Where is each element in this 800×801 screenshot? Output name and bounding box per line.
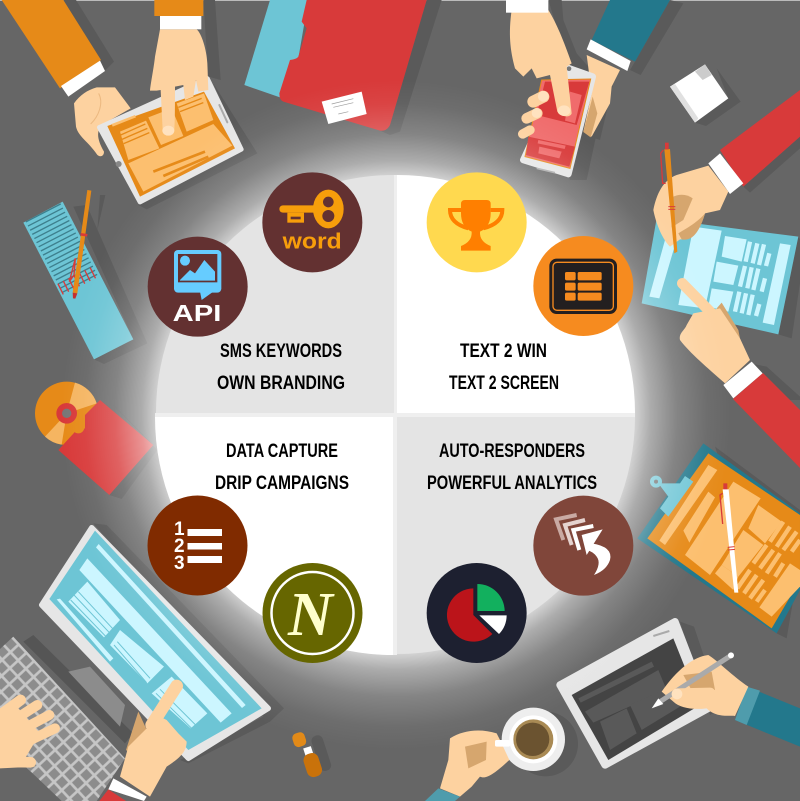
- USB stick: [291, 726, 333, 780]
- pointing hand on blue document: [680, 283, 800, 400]
- blue document: [642, 218, 800, 338]
- text: SMS keywords and own branding: [217, 341, 345, 394]
- panel: text 2 win and screen: [397, 175, 635, 413]
- coffee cup and hand: [425, 708, 578, 801]
- icon: N logo: N: [287, 581, 335, 649]
- icon: auto-reply arrow: [533, 496, 633, 596]
- icon: screen: [533, 236, 633, 336]
- icon: API image message: [148, 237, 248, 337]
- text: SMS keywords and own branding: OWN BRANDING: [217, 373, 345, 394]
- stylus hand and teal sleeve: [652, 652, 800, 747]
- icon: N logo: [262, 563, 362, 663]
- writing hand with pen and red sleeve: [653, 90, 800, 253]
- text: text 2 win and text 2 screen: [449, 341, 559, 394]
- illustration: lower-left desk items: [0, 382, 333, 801]
- icon: numbered list: [148, 496, 248, 596]
- drawing tablet: [560, 622, 722, 765]
- text: data capture and drip campaigns: [215, 441, 349, 494]
- panel: auto-responders and analytics: [397, 417, 635, 654]
- text: text 2 win and text 2 screen: TEXT 2 SCREEN: [449, 373, 559, 394]
- arm and hand holding tablet: [2, 0, 131, 156]
- panel: data capture and drip campaigns: [155, 417, 393, 655]
- text: auto-responders and powerful analytics: AUTO-RESPONDERS: [439, 441, 585, 462]
- text: SMS keywords and own branding: SMS KEYWORDS: [220, 341, 342, 362]
- top edge line: [0, 0, 800, 1]
- cross gap between panels: [155, 175, 635, 655]
- pointing hand on monitor: [99, 686, 187, 801]
- icon: API image message: API: [173, 300, 221, 326]
- icon: numbered list: 2: [174, 536, 185, 557]
- clipboard with white pen: [637, 443, 800, 638]
- icon: keyword: word: [282, 228, 342, 253]
- icon: keyword: [262, 172, 362, 272]
- panel: SMS keywords and branding: [156, 175, 394, 413]
- illustration: top-right desk items: [506, 0, 800, 400]
- illustration: top-left desk items: [2, 0, 442, 364]
- tablet with orange screen: [99, 78, 257, 209]
- folder with business card: [244, 0, 442, 135]
- phone and hands: [506, 0, 683, 180]
- keyboard and stand: [0, 635, 133, 801]
- pointing hand on tablet: [150, 0, 221, 136]
- illustration: lower-right desk items: [425, 443, 800, 801]
- monitor with blue screen: [42, 523, 284, 763]
- red sleeve, lower right arm: [733, 373, 800, 468]
- icon: pie chart: [427, 563, 527, 663]
- text: auto-responders and powerful analytics: POWERFUL ANALYTICS: [427, 473, 597, 494]
- icon: trophy: [427, 172, 527, 272]
- text: data capture and drip campaigns: DATA CAPTURE: [226, 441, 338, 462]
- text: text 2 win and text 2 screen: TEXT 2 WIN: [460, 341, 547, 362]
- notebook with pen: [23, 190, 147, 364]
- text: data capture and drip campaigns: DRIP CAMPAIGNS: [215, 473, 349, 494]
- hand on keyboard: [0, 700, 55, 768]
- icon: numbered list: 1: [174, 519, 185, 540]
- icon: numbered list: 3: [174, 553, 185, 574]
- text: auto-responders and powerful analytics: [427, 441, 597, 494]
- sticky note pad: [670, 64, 741, 126]
- CD with red sleeve: [35, 382, 157, 499]
